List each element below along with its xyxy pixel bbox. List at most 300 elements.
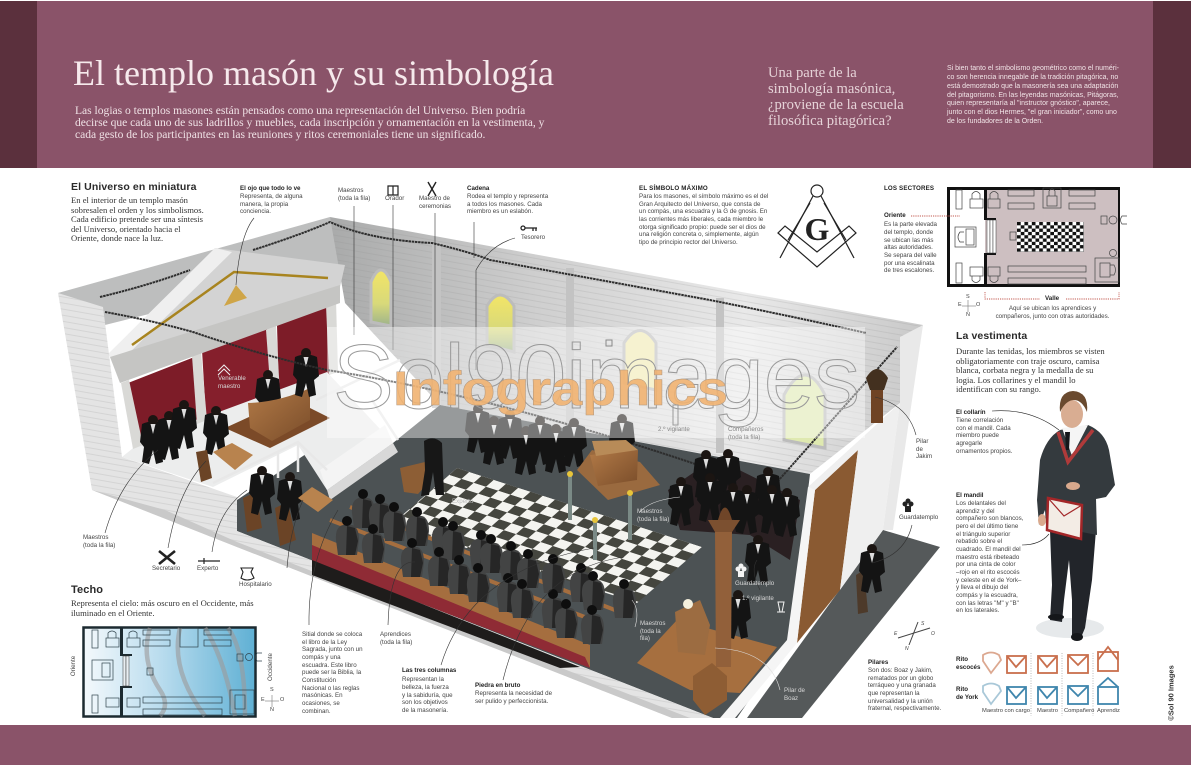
label: occidente rotated: Occidente [267,653,274,681]
label: rito de york: de York [956,694,978,701]
label: maestros left [83,534,115,549]
rite aprons: Scottish rite [983,647,1118,673]
label: pilar de jakim [916,438,932,460]
text: el símbolo máximo: las corrientes más liberales, cada miembro le [639,216,763,223]
heading: El Universo en miniatura [71,181,197,193]
label: all-seeing eye: Representa, de alguna [240,193,303,200]
plan compass letters: S [966,294,970,300]
gold cord [132,272,328,345]
label: cadena: Rodea el templo y representa [467,193,548,200]
ceiling tree veins [147,628,245,716]
ceiling compass letters: E [261,697,265,703]
second warden desk [577,414,660,500]
text: sitial: Sitial donde se coloca [302,631,362,638]
label: rito escocés [956,656,980,671]
label: maestros left: Maestros [83,534,108,541]
text: el mandil: compañero son blancos, [956,515,1023,522]
back row men [465,404,587,475]
icon: masonic square and compass with G [778,185,856,267]
paragraph: Representa el cielo: más oscuro en el Occidente, más [71,598,254,608]
label: maestros lower: (toda la [640,628,661,635]
label: segundo vigilante: 2.º vigilante [658,426,690,433]
ceiling plan [84,627,262,716]
label: compañeros [728,426,764,441]
paragraph: Durante las tenidas, los miembros se visten [956,346,1105,356]
paragraph [71,195,204,243]
label: rito de york: Rito [956,686,968,693]
chequered floor [392,468,702,603]
plan compass letters: E [958,302,962,308]
text: piedra en bruto: ser pulido y perfeccionista. [475,698,548,705]
heading: Techo [71,584,103,596]
intro text: cada gesto de los participantes en las reuniones y ritos ceremoniales tiene un significado. [75,129,485,141]
labels: apron ranks [982,708,1120,714]
paragraph: iluminado en el Oriente. [71,608,155,618]
paragraph: obligatoriamente con traje oscuro, camisa [956,356,1099,366]
text: el mandil: maestro está ribeteado [956,554,1019,561]
label: venerable maestro: Venerable [218,375,246,382]
text: el mandil: por una cinta de color [956,561,1016,568]
text: el mandil: rebatido sobre el [956,538,1002,545]
watermark panel [327,327,865,438]
label: maestro de ceremonias: Maestro de [419,195,450,202]
plan steps [987,220,996,253]
text: el mandil: cuadrado. El mandil del [956,546,1021,553]
ceiling compass letters [261,687,284,713]
icon: crossed quills [159,551,175,564]
text: el collarín: El collarín [956,409,986,416]
text: el collarín: con el mandil. Cada [956,425,1011,432]
text: piedra en bruto: Piedra en bruto [475,682,520,689]
pillar of Boaz [693,508,740,715]
right back corner [883,325,923,530]
text: sitial: Sagrada, junto con un [302,646,363,653]
text: el mandil: compás y la escuadra, [956,592,1018,599]
lamp [683,599,693,609]
ceiling divider [120,627,132,716]
label: aprendices: Aprendices [380,631,411,638]
text: el símbolo máximo: otorga significado propio: puede ser el dios de [639,224,766,231]
text: sitial: escuadra. Este libro [302,662,357,669]
label: orador: Orador [385,195,404,202]
label: maestros right [637,508,669,523]
apron [1047,498,1082,539]
intro text [75,105,544,141]
label: all-seeing eye [240,185,303,215]
text: el collarín [956,409,1012,455]
ceiling compass letters: N [270,707,274,713]
label: compañeros: (toda la fila) [728,434,760,441]
bottom band [0,725,1191,765]
compass rose on floor: S [921,621,925,627]
ceiling compass [265,695,279,707]
text: las tres columnas: y la sabiduría, que [402,692,453,699]
seated apprentices [336,489,636,644]
heading: La vestimenta [956,330,1027,342]
label: pilar de boaz [784,687,805,702]
paragraph: del Universo, orientado hacia el [71,224,181,234]
secretary chair [196,450,212,482]
text: el símbolo máximo [639,184,768,246]
text: sitial [302,631,363,715]
text: sitial: combinan. [302,708,331,715]
columns [121,300,338,449]
text: oriente: por una escalinata [884,260,935,267]
section: techo [71,584,254,618]
label: pilar de boaz: Boaz [784,695,798,702]
text: oriente: altas autoridades. [884,244,933,251]
text: pilares: fraternal, respectivamente. [868,705,941,712]
text: sitial: el libro de la Ley [302,639,347,646]
text: el símbolo máximo: Para los masones, el símbolo máximo es el del [639,193,768,200]
text: el mandil: en los laterales. [956,607,999,614]
wall pilasters [432,243,724,453]
expert standing [421,438,444,496]
text: piedra en bruto: Representa la necesidad de [475,690,552,697]
label: maestro de ceremonias: ceremonias [419,203,451,210]
sidebar answer: quien representaría al "instructor gnóstico", aparece, [947,100,1110,107]
icon: key [521,226,537,231]
icon: crossed staffs [428,182,436,196]
paragraph [956,346,1105,394]
sidebar question: ¿proviene de la escuela [768,97,904,113]
outside guard [856,544,885,614]
sidebar answer: Si bien tanto el simbolismo geométrico como el numéri- [947,65,1119,72]
text: O [976,302,980,308]
text: las tres columnas: Las tres columnas [402,667,456,674]
sidebar answer [946,64,1119,125]
label: pilar de jakim: de [916,446,923,453]
paragraph: En el interior de un templo masón [71,195,188,205]
label: rito escocés: Rito [956,656,968,663]
left hand [1066,482,1080,490]
label: maestros left: (toda la fila) [83,542,115,549]
label: rito escocés: escocés [956,664,980,671]
master desk [248,388,310,441]
label: hospitalario: Hospitalario [239,581,272,588]
intro text: decirse que cada uno de sus ladrillos y muebles, cada inscripción y ornamentación en la vestimenta, y [75,117,544,129]
compass rose on floor: N [905,646,909,652]
label: maestros top: Maestros [338,187,363,194]
entablature [110,285,340,383]
dotted separators [1031,653,1093,716]
icon: guard sword floor [736,564,746,577]
text: el mandil: pero el del último tiene [956,523,1018,530]
venerable master [255,370,281,419]
label: all-seeing eye: El ojo que todo lo ve [240,185,301,192]
text: las tres columnas: de la masonería. [402,707,448,714]
leader lines [105,205,916,680]
text: el mandil: con las letras "M" y "B" [956,600,1019,607]
label: venerable maestro [218,375,246,390]
right wall [808,403,900,590]
apron leader [1022,534,1049,545]
credit: ©Sol 90 Images [1166,665,1176,721]
header band [0,1,1191,168]
pediment [110,248,345,357]
plan divider wall [984,188,996,286]
label: rito de york [956,686,978,701]
label: maestros right: Maestros [637,508,662,515]
icon: second warden level [673,405,678,425]
oriente raised floor [122,372,393,490]
text: valle description: compañeros, junto con otras autoridades. [996,313,1109,320]
paragraph: Cada edificio pretende ser una síntesis [71,214,203,224]
head [1061,400,1083,428]
back wall [330,217,923,474]
ceiling furniture [92,628,262,715]
collar sash [1058,430,1093,462]
right hand [1038,514,1046,526]
labels: apron ranks: Compañero [1064,708,1094,714]
text: piedra en bruto [475,682,552,705]
right wall door [797,450,858,643]
watermark Sol90images: Sol90images [333,327,860,428]
compass rose on floor: O [931,631,935,637]
heading: los sectores: LOS SECTORES [884,185,934,192]
label: venerable maestro: maestro [218,383,240,390]
sidebar question: Una parte de la [768,65,857,81]
label: maestros lower [640,620,666,642]
text: oriente: Oriente [884,212,906,219]
title: El templo masón y su simbología [73,53,554,93]
text: el mandil: Los delantales del [956,500,1006,507]
compass rose on floor: E [894,631,898,637]
label: maestro de ceremonias [419,195,451,210]
label: pilar de jakim: Jakim [916,453,932,460]
text: oriente: Se separa del valle [884,252,937,259]
icon: small square [606,340,612,346]
neck and shirt [1062,425,1088,456]
compass rose on floor [894,621,935,652]
watermark Infographics: Infographics [393,363,728,416]
text: el mandil: y lleva el dibujo del [956,584,1008,591]
label: aprendices [380,631,412,646]
label: pilar de jakim: Pilar [916,438,928,445]
label: guardatemplo outside: Guardatemplo [899,514,938,521]
text: el collarín: Tiene correlación [956,417,1003,424]
first warden platform [637,620,777,693]
plan compass letters [958,294,980,318]
text: pilares: universalidad y la unión [868,698,933,705]
lower chairs [243,492,296,546]
companions bench backdrop [668,458,800,560]
label: all-seeing eye: conciencia. [240,208,271,215]
pillar of Jakim [866,369,888,423]
plan compass letters: N [966,312,970,318]
paragraph: blanca, corbata negra y la medalla de su [956,365,1093,375]
text: el mandil: el triángulo superior [956,531,1010,538]
paragraph: sobresalen el orden y los simbolismos. [71,204,204,214]
text: el collarín: agregarle [956,440,982,447]
label: aprendices: (toda la fila) [380,639,412,646]
secretary desk [213,443,253,470]
text: oriente: del templo, donde [884,229,933,236]
back wall upper left [58,217,345,325]
label: cadena: miembro es un eslabón. [467,208,533,215]
sidebar question: filosófica pitagórica? [768,113,892,129]
lower desk [298,487,333,512]
icon: guard sword top [902,498,914,512]
sidebar question: simbología masónica, [768,81,895,97]
ceiling steps [123,656,129,686]
watermark [327,327,865,438]
label: maestros top: (toda la fila) [338,195,370,202]
text: oriente [884,212,937,274]
ceiling compass letters: O [280,697,284,703]
text: el símbolo máximo: Gran Arquitecto del Universo, que consta de [639,201,760,208]
pew benches [330,507,620,622]
icon: chevron master [218,365,230,375]
temple floor [237,405,810,718]
rite aprons: York rite [983,678,1118,704]
labels: apron ranks: Maestro con cargo [982,708,1030,714]
officers near the wall [293,348,319,397]
label: primer vigilante: 1.º vigilante [742,595,774,602]
text: las tres columnas: son los objetivos [402,699,448,706]
plan furniture [955,188,1127,284]
text: oriente: se ubican las más [884,237,934,244]
text: sitial: Constitución [302,677,336,684]
label: cadena: a todos los masones. Cada [467,201,542,208]
text: pilares: rematados por un globo [868,675,933,682]
sidebar answer: del pitagorismo. En las leyendas masónicas, Pitágoras, [947,92,1119,99]
oriente alcove [107,248,400,546]
left dark strip [0,1,37,168]
text: el mandil: –rojo en el rito escocés [956,569,1020,576]
label: maestros lower: Maestros [640,620,665,627]
text: el mandil: aprendiz y del [956,508,995,515]
icon: purse [241,568,254,580]
label: maestros lower: fila) [640,635,650,642]
text: sitial: compás y una [302,654,341,661]
exterior floor right [747,530,940,718]
text: el mandil [956,492,1023,614]
label: experto: Experto [197,565,218,572]
left outer wall and front band [58,293,713,718]
text: las tres columnas [402,667,456,714]
icon: masonic square and compass with G: G [805,211,830,247]
label: pilar de boaz: Pilar de [784,687,805,694]
label: experto floor: Experto [452,498,473,505]
sidebar answer: de los fundadores de la Orden. [947,118,1043,125]
collar leader [992,411,1059,430]
text: valle description [996,305,1109,320]
label: tesorero: Tesorero [521,234,545,241]
text: pilares [868,659,941,712]
seated masters left [140,400,229,464]
red dotted callouts [911,216,1119,299]
text: valle description: Aquí se ubican los aprendices y [1009,305,1096,312]
lower officers [249,466,303,521]
text: el símbolo máximo: EL SÍMBOLO MÁXIMO [639,185,708,192]
icon: plumb level [777,602,785,612]
paragraph: identifican con su rango. [956,384,1041,394]
section: universe in miniature [71,181,204,243]
shoes [1048,614,1083,641]
red panels [128,356,200,445]
icon: sword [198,558,220,564]
labels: apron ranks: Maestro [1037,708,1058,714]
plan valley [985,190,1118,284]
labels: apron ranks: Aprendiz [1097,708,1120,714]
altar [400,462,427,494]
companions right [668,449,800,584]
sidebar answer: co son herencia innegable de la tradición pitagórica, no [947,74,1118,81]
text: el símbolo máximo: una religión concreta o, simplemente, algún [639,231,759,238]
label: maestros right: (toda la fila) [637,516,669,523]
label: guardatemplo inside: Guardatemplo [735,580,774,587]
label: compañeros: Compañeros [728,426,763,433]
shadow [1036,618,1104,638]
text: el símbolo máximo: tipo de principio rector del Universo. [639,239,738,246]
hair [1060,391,1087,412]
label: all-seeing eye: manera, la propia [240,201,288,208]
label: cadena: Cadena [467,185,489,192]
label: maestros top [338,187,370,202]
text: sitial: ocasiones, se [302,700,340,707]
figure: mason in regalia [1036,391,1115,641]
text: el collarín: miembro puede [956,432,999,439]
text: el mandil: El mandil [956,492,984,499]
text: las tres columnas: Representan la [402,676,444,683]
text: el símbolo máximo: un compás, una escuadra y la G de gnosis. En [639,208,767,215]
label: cadena [467,185,548,215]
plan chequered floor [1017,222,1084,252]
steps [327,443,398,500]
candles [567,471,633,560]
railing [213,360,400,483]
text: oriente: de tres escalones. [884,267,934,274]
sidebar question [768,65,904,129]
intro text: Las logias o templos masones están pensados como una representación del Universo. Bien podría [75,105,525,117]
label: secretario: Secretario [152,565,180,572]
text: pilares: terráqueo y una granada [868,682,936,689]
right dark strip [1153,1,1191,168]
plan compass [962,300,976,312]
floor plan: sectors [948,188,1127,286]
triangle with eye [224,285,247,306]
sidebar answer: está demostrado que la masonería sea una adaptación [947,83,1118,90]
first warden desk [675,600,710,655]
text: pilares: Pilares [868,659,888,666]
jacket [1037,425,1115,535]
text: sitial: puede ser la Biblia, la [302,669,361,676]
pew rows [312,489,636,668]
icon: book [388,186,398,195]
text: pilares: Son dos: Boaz y Jakim, [868,667,933,674]
text: sitial: Nacional o las reglas [302,685,359,692]
legs [1050,530,1096,640]
text: el mandil: y celeste en el de York– [956,577,1021,584]
text: pilares: que representan la [868,690,920,697]
text: sitial: masónicas. En [302,692,343,699]
stained windows [371,270,825,448]
sidebar answer: junto con el dios Hermes, "el gran iniciador", como uno [947,109,1117,116]
paragraph [71,598,254,618]
paragraph: Oriente, donde nace la luz. [71,233,163,243]
text: oriente: Es la parte elevada [884,221,937,228]
label: valle: Valle [1045,295,1059,302]
text: el collarín: ornamentos propios. [956,448,1012,455]
label: oriente rotated: Oriente [70,656,77,676]
first warden [725,590,751,639]
tie [1065,432,1070,450]
text: las tres columnas: belleza, la fuerza [402,684,449,691]
master platform [225,407,330,448]
section: la vestimenta [956,330,1105,394]
ceiling compass letters: S [270,687,274,693]
